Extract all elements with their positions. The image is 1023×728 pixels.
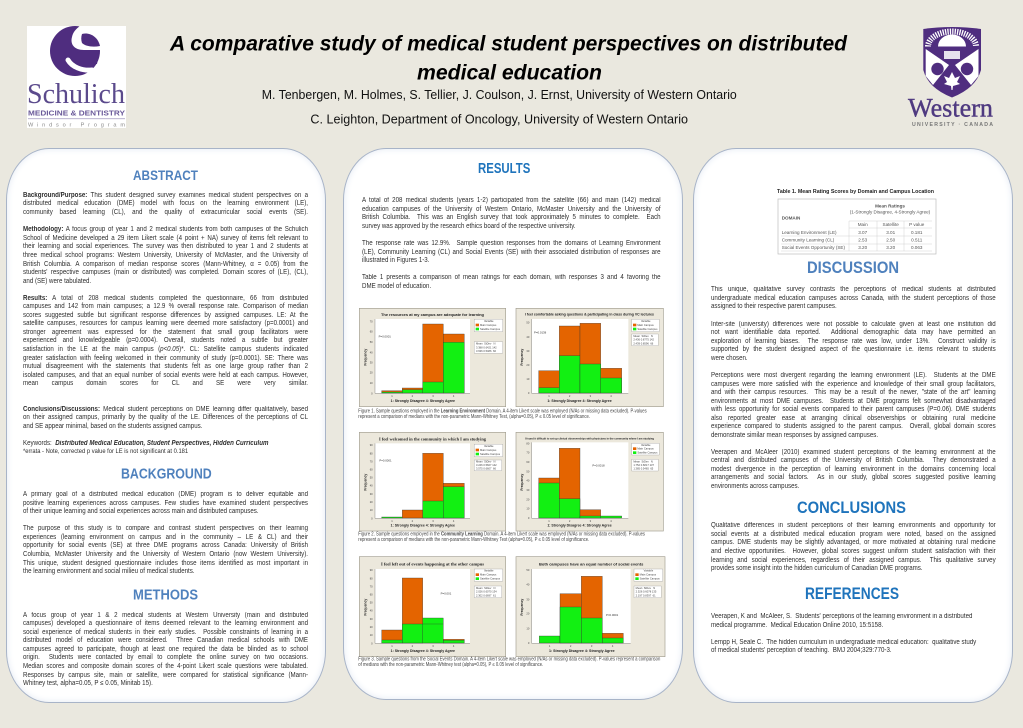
chart: welcomed in the community: 3 [432, 519, 434, 523]
text: results summary: campuses and 142 from main campuses; a 12.9 % overall response rate. Comparison of median [23, 303, 308, 310]
caption: figure 1: represent a comparison of medians with the non-parametric Mann-Whitney Test, (alpha=0.05), P ≤ 0.05 level of significance. [358, 414, 590, 420]
text: methods paragraph: origin. Students were contacted by email to complete the online survey on two occasions. [23, 654, 308, 661]
chart: equal number of social events: 1 [549, 644, 551, 648]
text: reference two: Lempp H, Seale C. The hidden curriculum in undergraduate medical education: qualitative study [711, 639, 976, 646]
text: methodology: British Columbia. A comparison of median response scores (Mann-Whitney, α = 0.05) from the [23, 261, 308, 268]
chart: difficult to set up clinical observerships: P=0.0018 [592, 464, 605, 468]
chart: resources adequate for learning: 2 [412, 394, 414, 398]
text: discussion paragraph four: central and distributed campuses of the University of British Columbia. They demonstrated a [711, 457, 995, 464]
chart: welcomed in the community: 1: Strongly Disagree 4: Strongly Agree [391, 524, 455, 528]
chart: resources adequate for learning: 70 [370, 320, 373, 324]
text: results paragraph two: (LE), Community Learning (CL) and Social Events (SE) with their associated distribution of responses are [362, 249, 660, 256]
text: results paragraph one: survey was approved by the research ethics board of the respective university. [362, 223, 575, 230]
table 1: mean rating scores: DOMAIN [782, 216, 801, 220]
figure 3: social events charts [359, 556, 666, 657]
chart: equal number of social events: 2.526 0.6078 135 [636, 590, 657, 594]
chart: resources adequate for learning: 3.636 0.5486 66 [476, 349, 496, 353]
text: results summary: satisfaction in the LE at the main campus (p<0.05)*. CL: Satellite campus students indicated [23, 346, 308, 353]
text: discussion paragraph two: not want identifiable data reported. Additional demographic data may have permitted an [711, 329, 995, 336]
chart: comfortable asking questions: Mean StDev N [633, 334, 653, 338]
caption: figure 2: Figure 2. Sample questions employed in the Community Learning Domain. A 4-item Likert scale was employed (N/As or missing data excluded). P-values [358, 532, 645, 538]
table 1: mean rating scores: Community Learning (CL) [782, 238, 835, 243]
text: discussion paragraph two [711, 321, 996, 362]
logo: Western University Canada: Western [908, 94, 993, 122]
text: conclusions paragraph: social events at a distributed medical education program were noted, based on the assigned [711, 531, 995, 538]
chart: welcomed in the community: 4 [453, 519, 455, 523]
text: conclusions paragraph: and elective opportunities. However, global scores suggest uniform student satisfaction with their [711, 548, 995, 555]
chart: equal number of social events: 0 [528, 641, 530, 645]
chart: difficult to set up clinical observerships: 40 [526, 479, 530, 483]
chart: left out of events at the other campus: 4 [453, 644, 455, 648]
chart: welcomed in the community: P=0.0001 [379, 459, 392, 463]
text: methodology: Methodology: A focus group of year 1 and 2 medical students from both campuses of the Schulich [23, 226, 308, 233]
chart: resources adequate for learning: 3 [432, 394, 434, 398]
text: reference one: medical programme. Medical Education Online 2010, 15:5158. [711, 622, 883, 629]
text: discussion paragraph one: assigned to their respective parent campuses. [711, 303, 836, 310]
chart: resources adequate for learning: 10 [370, 381, 373, 385]
chart: equal number of social events: 50 [526, 568, 530, 572]
chart: difficult to set up clinical observerships: 3 [590, 519, 592, 523]
text: discussion paragraph two: supported by the student designed aspect of the questionnaire i.e. items relevant to students [711, 346, 995, 353]
chart: equal number of social events: 2.197 0.8397 61 [636, 593, 656, 597]
chart: comfortable asking questions: Satellite Campus [637, 327, 658, 331]
text: background paragraph two: Columbia, McMaster University and the University of Western Ontario (now Western University). [23, 551, 308, 558]
table 1: mean rating scores: Social Events Opportunity (SE) [782, 245, 845, 250]
text: results paragraph one: education campuses of the University of Western Ontario, McMaster University and the University of [362, 206, 660, 213]
text: results summary: isolated campuses, and that an equal number of social events were held at each campus. However, [23, 372, 308, 379]
table 1: mean rating scores: Learning Environment (LE) [782, 230, 837, 235]
chart: comfortable asking questions: 10 [526, 377, 530, 381]
text: results summary: satellite campuses, resources for campus learning were deemed more satisfactory (p=0.0001) and [23, 320, 308, 327]
chart: comfortable asking questions: 2.439 0.8596 66 [633, 341, 654, 345]
text: discussion paragraph three: environments at most DME campuses. Students at DME programs felt somewhat disadvantaged [711, 398, 995, 405]
chart: left out of events at the other campus: 10 [370, 633, 373, 637]
heading: conclusions: CONCLUSIONS [797, 499, 906, 517]
chart: comfortable asking questions: Frequency [520, 349, 524, 366]
chart: equal number of social events: 10 [526, 626, 530, 630]
chart: resources adequate for learning: Main Campus [480, 323, 497, 327]
text: methods paragraph: campuses agreed to participate, though at least one required the data be blinded as to school [23, 646, 308, 653]
text: reference two [711, 639, 976, 654]
chart: welcomed in the community: 30 [370, 492, 373, 496]
caption: figure 1: Figure 1. Sample questions employed in the Learning Environment Domain. A 4-item Likert scale was employed (N/As or missing data excluded). P-values [358, 408, 647, 414]
table 1: mean rating scores: 3.20 [858, 245, 868, 250]
text: discussion paragraph three: campuses were more satisfied with the experience and knowledge of their small group facilitators, [711, 381, 995, 388]
table 1: mean rating scores: P value [909, 222, 925, 227]
chart: difficult to set up clinical observerships: 1.385 0.5465 65 [633, 467, 654, 471]
chart: resources adequate for learning: 40 [370, 350, 373, 354]
text: discussion paragraph three: Perceptions were most divergent regarding the learning environment (LE). Students at the DME [711, 372, 995, 379]
chart: left out of events at the other campus: Main Campus [480, 573, 497, 577]
text: background paragraph one: positive learning experiences across campuses. Few studies have examined student perspectives [23, 500, 308, 507]
table 1: mean rating scores: 2.50 [886, 238, 896, 243]
text: conclusions paragraph: learning and social experiences, regardless of their assigned campus. This qualitative survey [711, 557, 995, 564]
chart: equal number of social events: Frequency [520, 599, 524, 616]
chart: comfortable asking questions: I feel comfortable asking questions & participating in class during VC lectures [525, 313, 654, 317]
table 1: mean rating scores: 3.01 [886, 230, 896, 235]
chart: left out of events at the other campus: 0 [371, 641, 373, 645]
chart: equal number of social events [516, 557, 665, 657]
chart: welcomed in the community: 10 [370, 508, 373, 512]
text: discussion paragraph three: and with their campus resources. This may be a result of the newer, "state of the art" learning [711, 389, 995, 396]
chart: difficult to set up clinical observerships: Frequency [520, 474, 524, 491]
chart: left out of events at the other campus: 1 [391, 644, 393, 648]
text: results paragraph two [362, 240, 661, 264]
chart: welcomed in the community: 2 [412, 519, 414, 523]
table 1: mean rating scores: Mean Ratings [875, 203, 905, 208]
chart: welcomed in the community: 3.575 0.6607 66 [476, 466, 496, 470]
chart: comfortable asking questions: 4 [610, 394, 612, 398]
text: methodology: their learning and social experiences. The survey was then distributed to year 1 and 2 students at [23, 243, 308, 250]
chart: difficult to set up clinical observerships: Variable [641, 443, 651, 447]
text: discussion paragraph one [711, 286, 996, 310]
chart: difficult to set up clinical observerships: 0 [528, 516, 530, 520]
text: background paragraph two: experiences (learning environment on campus and in the community – LE & CL) and their [23, 534, 308, 541]
chart: left out of events at the other campus: Mean StDev N [476, 586, 496, 590]
chart: resources adequate for learning: Frequency [363, 349, 367, 366]
chart: resources adequate for learning: 3.388 0.6421 142 [476, 345, 497, 349]
table 1: mean rating scores: 0.181 [911, 230, 923, 235]
chart: welcomed in the community: Frequency [363, 474, 367, 491]
chart: equal number of social events: 4 [612, 644, 614, 648]
chart: resources adequate for learning: 1: Strongly Disagree 4: Strongly Agree [391, 399, 455, 403]
chart: equal number of social events: 2 [570, 644, 572, 648]
chart: comfortable asking questions: 40 [526, 335, 530, 339]
text: conclusions and discussions: and SE appear minimal, based on the students assigned campus. [23, 423, 202, 430]
logo: Schulich Medicine & Dentistry [27, 26, 126, 128]
text: methodology [23, 226, 308, 285]
chart: welcomed in the community: 80 [370, 451, 373, 455]
text: results paragraph three: Table 1 presents a comparison of mean ratings for each domain, with responses 3 and 4 favoring the [362, 274, 660, 281]
text: results paragraph two: The response rate was 12.9%. Sample question responses from the domains of Learning Environment [362, 240, 660, 247]
table 1: mean rating scores: 3.20 [886, 245, 896, 250]
text: results summary: scores suggested subtle but significant response differences by assigned campuses. LE: At the [23, 312, 308, 319]
table 1: mean rating scores [777, 189, 936, 254]
text: methods paragraph: Whitney test, alpha=0.05, P ≤ 0.05, Minitab 15). [23, 680, 153, 687]
heading: results: RESULTS [478, 161, 530, 177]
text: discussion paragraph one: undergraduate medical education campuses across Canada, with the student perceptions of those [711, 295, 995, 302]
text: background and purpose [23, 192, 308, 216]
text: background and purpose: Background/Purpose: This student designed survey examines medical student perspectives on a [23, 192, 308, 199]
caption: figure 3 [358, 656, 660, 668]
logo: Schulich Medicine & Dentistry: Schulich [27, 78, 125, 110]
text: methods paragraph [23, 612, 308, 687]
chart: resources adequate for learning: 1 [391, 394, 393, 398]
chart: resources adequate for learning: Mean StDev N [476, 342, 496, 346]
chart: difficult to set up clinical observerships: I found it difficult to set up clinical observerships with physicians in the community where I am studying [525, 436, 654, 440]
text: discussion paragraph three: demonstrate similar mean responses by assigned campuses. [711, 432, 878, 439]
chart: resources adequate for learning: 4 [453, 394, 455, 398]
chart: comfortable asking questions: 2.436 0.8775 142 [633, 338, 655, 342]
heading: references: REFERENCES [805, 585, 899, 603]
text: results summary: stronger agreement was expressed for the statement that small group facilitators were [23, 329, 308, 336]
text: reference two: of medical students' perception of teaching. BMJ 2004;329:770-3. [711, 647, 891, 654]
chart: comfortable asking questions: 1: Strongly Disagree 4: Strongly Agree [547, 399, 612, 403]
text: discussion paragraph three: also reported greater ease at arranging clinical observerships or obtaining rural medicine [711, 415, 995, 422]
caption: figure 3: Figure 3. Sample questions from the Social Events Domain. A 4-item Likert scale was employed (N/As or missing data excluded). P-values represent a comparison [358, 656, 660, 662]
chart: welcomed in the community: 0 [371, 516, 373, 520]
caption: figure 1 [358, 408, 647, 420]
logo: Western University Canada [908, 27, 993, 128]
chart: comfortable asking questions [516, 308, 663, 407]
chart: welcomed in the community: 1 [391, 519, 393, 523]
chart: equal number of social events: Mean StDev N [636, 586, 655, 590]
chart: welcomed in the community: Main Campus [480, 448, 497, 452]
chart: difficult to set up clinical observerships: Main Campus [637, 447, 654, 451]
chart: equal number of social events: P=0.0001 [606, 613, 619, 617]
text: discussion paragraph four: Veerapen and McAleer (2010) examined student perceptions of the learning environment at the [711, 449, 995, 456]
text: conclusions paragraph: provides some insight into the hidden curriculum of Canadian DME programs. [711, 565, 922, 572]
text: discussion paragraph one: This unique, qualitative survey contrasts the perceptions of medical students at distributed [711, 286, 995, 293]
chart: resources adequate for learning: Satellite Campus [480, 327, 501, 331]
chart: difficult to set up clinical observerships: 80 [526, 441, 530, 445]
chart: resources adequate for learning [359, 308, 506, 407]
chart: resources adequate for learning: 50 [370, 340, 373, 344]
chart: equal number of social events: 3 [591, 644, 593, 648]
text: conclusions and discussions [23, 406, 308, 430]
chart: difficult to set up clinical observerships: 1: Strongly Disagree 4: Strongly Agree [547, 524, 612, 528]
text: methods paragraph: Median scores and composite domain scores of the 4-point Likert scale questions were tabulated. [23, 663, 308, 670]
chart: left out of events at the other campus: 20 [370, 625, 373, 629]
text: background and purpose: community based learning (CL), and the quality of extracurricular social events (SE). [23, 209, 308, 216]
text: methods paragraph: A focus group of year 1 & 2 medical students at Western University (main and distributed [23, 612, 308, 619]
chart: welcomed in the community: 20 [370, 500, 373, 504]
text: discussion paragraph four [711, 449, 996, 490]
text: methodology: three medical school programs: Western University, University of McMaster, and the University of [23, 252, 308, 259]
text: discussion paragraph four: modest divergence in the perception of learning environment in the domains concerning local [711, 466, 995, 473]
logo: Schulich Medicine & Dentistry: MEDICINE & DENTISTRY [28, 108, 125, 118]
table 1: mean rating scores: Satellite [883, 222, 899, 227]
text: results summary: mutual disagreement with the statements that students felt as one large group rather than 2 [23, 363, 308, 370]
chart: comfortable asking questions: 1 [548, 394, 550, 398]
text: discussion paragraph four: environments across campuses. [711, 483, 799, 490]
chart: left out of events at the other campus: 2 [412, 644, 414, 648]
title: medical education [417, 62, 602, 84]
figure 1: learning environment charts [359, 308, 664, 407]
heading: methods: METHODS [133, 587, 198, 603]
chart: left out of events at the other campus: 1: Strongly Disagree 4: Strongly Agree [391, 649, 455, 653]
chart: left out of events at the other campus: 70 [370, 584, 373, 588]
text: conclusions and discussions: Conclusions/Discussions: Medical student perceptions on DME learning differ qualitatively, based [23, 406, 308, 413]
table 1: mean rating scores: 0.063 [911, 245, 923, 250]
chart: difficult to set up clinical observerships: 30 [526, 488, 530, 492]
text: discussion paragraph two: Inter-site (university) differences were not possible to calculate given at least one institution did [711, 321, 995, 328]
text: keywords: Keywords: Distributed Medical Education, Student Perspectives, Hidden Curriculum [23, 440, 268, 447]
text: methods paragraph: distributed model of education were considered. Three Canadian medical schools with DME [23, 637, 308, 644]
text: errata: *errata - Note, corrected p value for LE is not significant at 0.181 [23, 448, 188, 455]
text: methods paragraph: social experience of medical students in their early studies. Possible constraints of learning in a [23, 629, 308, 636]
chart: left out of events at the other campus: 3 [432, 644, 434, 648]
text: conclusions paragraph [711, 522, 996, 572]
chart: equal number of social events: Satellite Campus [640, 577, 660, 581]
chart: left out of events at the other campus: Variable [484, 569, 494, 573]
chart: welcomed in the community: 40 [370, 484, 373, 488]
panel: left column [6, 148, 326, 703]
chart: difficult to set up clinical observerships: 2 [569, 519, 571, 523]
chart: resources adequate for learning: P=0.0001 [379, 335, 391, 339]
text: background paragraph one: of their unique learning and social experiences across main and distributed campuses. [23, 508, 259, 515]
chart: comfortable asking questions: 2 [569, 394, 571, 398]
chart: comfortable asking questions: Main Campus [637, 323, 654, 327]
text: discussion paragraph three [711, 372, 996, 439]
chart: difficult to set up clinical observerships: 20 [526, 497, 530, 501]
table 1: mean rating scores: (1-Strongly Disagree, 4-Strongly Agree) [850, 209, 931, 214]
text: results paragraph two: illustrated in Figures 1-3. [362, 257, 429, 264]
chart: left out of events at the other campus: 2.302 0.6697 61 [476, 593, 496, 597]
text: results paragraph three [362, 274, 660, 290]
chart: welcomed in the community: 60 [370, 467, 373, 471]
table 1: mean rating scores: Main [858, 222, 868, 227]
chart: difficult to set up clinical observerships [516, 432, 663, 531]
text: results summary: experienced and knowledgeable (p=0.0004). Overall, students noted a subtle but greater [23, 337, 308, 344]
text: background and purpose: distributed medical education (DME) model with focus on the learning environment (LE), [23, 200, 308, 207]
text: methods paragraph: campuses) developed a questionnaire of items deemed relevant to the learning environment and [23, 620, 308, 627]
chart: equal number of social events: 20 [526, 612, 530, 616]
text: conclusions paragraph: Qualitative differences in student perceptions of their learning environments and opportunity for [711, 522, 995, 529]
chart: difficult to set up clinical observerships: 60 [526, 460, 530, 464]
chart: left out of events at the other campus: Frequency [363, 599, 367, 616]
chart: left out of events at the other campus: I feel left out of events happening at the other campus [381, 562, 485, 566]
text: results summary: Results: A total of 208 medical students completed the questionnaire, 66 from distributed [23, 295, 308, 302]
chart: comfortable asking questions: 3 [590, 394, 592, 398]
text: background paragraph two: The purpose of this study is to compare and contrast student perspectives on their learning [23, 525, 308, 532]
chart: left out of events at the other campus: 40 [370, 609, 373, 613]
caption: figure 3: of medians with the non-parametric Mann-Whitney test (alpha=0.05), P ≤ 0.05 level of significance. [358, 662, 543, 668]
chart: resources adequate for learning: The resources at my campus are adequate for learning [381, 313, 484, 317]
chart: welcomed in the community [359, 432, 506, 531]
chart: welcomed in the community: Variable [484, 444, 494, 448]
chart: resources adequate for learning: 20 [370, 371, 373, 375]
text: background paragraph two: the learning environment and social milieu of medical students. [23, 568, 195, 575]
chart: comfortable asking questions: 50 [526, 321, 530, 325]
text: results summary: greater satisfaction with feeling welcomed in their community of study (p=0.0001). SE: There was [23, 355, 308, 362]
chart: difficult to set up clinical observerships: 1 [548, 519, 550, 523]
text: background paragraph two: This unique, student designed questionnaire includes those items identified as most important in [23, 560, 308, 567]
text: methodology: School of Medicine developed a 29 item Likert scale (4 point + NA) survey of items felt relevant to [23, 235, 308, 242]
figure 2: community learning charts [359, 432, 664, 532]
chart: equal number of social events: 1: Strongly Disagree 4: Strongly Agree [549, 649, 615, 653]
chart: comfortable asking questions: Variable [641, 319, 651, 323]
panel: results column [343, 148, 683, 700]
text: discussion paragraph three: with less opportunity for social events compared to their parent campuses (P=0.06). DME students [711, 406, 995, 413]
chart: difficult to set up clinical observerships: 50 [526, 469, 530, 473]
chart: resources adequate for learning: 60 [370, 330, 373, 334]
text: discussion paragraph four: arrangements and social factors. As in our study, global scores suggested positive learning [711, 474, 995, 481]
text: discussion paragraph two: were chosen. [711, 355, 747, 362]
table 1: mean rating scores: 2.53 [858, 238, 868, 243]
chart: difficult to set up clinical observerships: 10 [526, 507, 530, 511]
chart: resources adequate for learning: 30 [370, 361, 373, 365]
chart: equal number of social events: Both campuses have an equal number of social events [539, 562, 643, 566]
text: reference one: Veerapen, K and McAleer, S. Students' perceptions of the learning environment in a distributed [711, 613, 972, 620]
chart: left out of events at the other campus: 80 [370, 576, 373, 580]
title: A comparative study of medical student perspectives on distributed [169, 32, 848, 56]
text: methods paragraph: Responses by campus site, main or satellite, were compared for statistical significance (Mann- [23, 672, 308, 679]
chart: left out of events at the other campus: 30 [370, 617, 373, 621]
caption: figure 2 [358, 532, 645, 543]
heading: background: BACKGROUND [121, 467, 211, 483]
chart: left out of events at the other campus [359, 557, 506, 657]
text: results summary [23, 295, 308, 387]
text: discussion paragraph two: exploration of learning biases. The response rate was low, under 13%. Construct validity is [711, 338, 995, 345]
heading: abstract: ABSTRACT [133, 167, 198, 183]
chart: welcomed in the community: 50 [370, 476, 373, 480]
authors: C. Leighton, Department of Oncology, University of Western Ontario [310, 112, 688, 126]
authors: M. Tenbergen, M. Holmes, S. Tellier, J. Coulson, J. Ernst, University of Western Ontario [262, 88, 737, 102]
text: results paragraph three: DME model of education. [362, 283, 431, 290]
text: background paragraph two: opportunity for social events (SE) at three DME programs across Canada: University of British [23, 542, 308, 549]
chart: difficult to set up clinical observerships: Mean StDev N [633, 459, 653, 463]
text: results paragraph one [362, 197, 661, 230]
chart: welcomed in the community: Mean StDev N [476, 460, 496, 464]
caption: figure 2: represent a comparison of medians with the non-parametric Mann-Whitney Test (alpha=0.05), P ≤ 0.05 level of significance. [358, 537, 589, 543]
panel: right column [693, 148, 1013, 703]
text: background paragraph one [23, 491, 308, 515]
chart: welcomed in the community: I feel welcomed in the community in which I am studying [379, 436, 487, 441]
chart: left out of events at the other campus: 2.026 0.6070 134 [476, 590, 497, 594]
chart: left out of events at the other campus: 50 [370, 601, 373, 605]
chart: equal number of social events: Variable [644, 569, 654, 573]
text: background paragraph two [23, 525, 308, 575]
chart: welcomed in the community: 90 [370, 443, 373, 447]
title [169, 32, 848, 84]
chart: comfortable asking questions: 20 [526, 363, 530, 367]
text: discussion paragraph three: experience compared to students assigned to the parent campus. Overall, global domain scores [711, 423, 995, 430]
chart: left out of events at the other campus: 90 [370, 568, 373, 572]
text: methodology: students' respective campuses (main or distributed) was completed. Domain scores of (LE), (CL), [23, 269, 308, 276]
text: reference one [711, 613, 972, 629]
text: conclusions paragraph: campus. DME students may be slightly advantaged, or more motivated at obtaining rural medicine [711, 539, 995, 546]
table 1: mean rating scores: 3.07 [858, 230, 868, 235]
chart: equal number of social events: 30 [526, 597, 530, 601]
table 1: mean rating scores: 0.511 [911, 238, 923, 243]
chart: welcomed in the community: 70 [370, 459, 373, 463]
chart: equal number of social events: Main Campus [640, 573, 657, 577]
text: results paragraph one: British Columbia. This was an English survey that took approximately 5 minutes to complete. Each [362, 214, 660, 221]
text: methodology: and (SE) were tabulated. [23, 278, 91, 285]
text: results paragraph one: A total of 208 medical students (years 1-2) participated from the satellite (66) and main (142) medical [362, 197, 660, 204]
chart: resources adequate for learning: 0 [371, 391, 373, 395]
chart: left out of events at the other campus: 60 [370, 592, 373, 596]
text: results summary: mean campus domain scores for CL and SE were very similar. [23, 380, 308, 387]
chart: difficult to set up clinical observerships: 70 [526, 451, 530, 455]
chart: difficult to set up clinical observerships: Satellite Campus [637, 451, 658, 455]
chart: left out of events at the other campus: P=0.001 [441, 591, 452, 595]
chart: resources adequate for learning: Variable [484, 319, 494, 323]
chart: welcomed in the community: Satellite Campus [480, 452, 501, 456]
chart: comfortable asking questions: P=0.0138 [534, 330, 547, 334]
chart: equal number of social events: 40 [526, 583, 530, 587]
text: conclusions and discussions: on their assigned campus, primarily by the quality of the LE. Differences of the perceptions of CL [23, 414, 308, 421]
chart: difficult to set up clinical observerships: 1.752 0.6817 137 [633, 463, 655, 467]
logo: Western University Canada: UNIVERSITY · CANADA [912, 122, 993, 128]
chart: left out of events at the other campus: Satellite Campus [480, 577, 501, 581]
chart: difficult to set up clinical observerships: 4 [610, 519, 612, 523]
authors [262, 88, 737, 126]
chart: welcomed in the community: 3.246 0.5827 142 [476, 463, 497, 467]
text: background paragraph one: A primary goal of a distributed medical education (DME) program is to deliver equitable and [23, 491, 308, 498]
table 1: mean rating scores: Table 1. Mean Rating Scores by Domain and Campus Location [777, 189, 935, 195]
chart: comfortable asking questions: 30 [526, 349, 530, 353]
chart: comfortable asking questions: 0 [528, 391, 530, 395]
heading: discussion: DISCUSSION [807, 259, 899, 277]
